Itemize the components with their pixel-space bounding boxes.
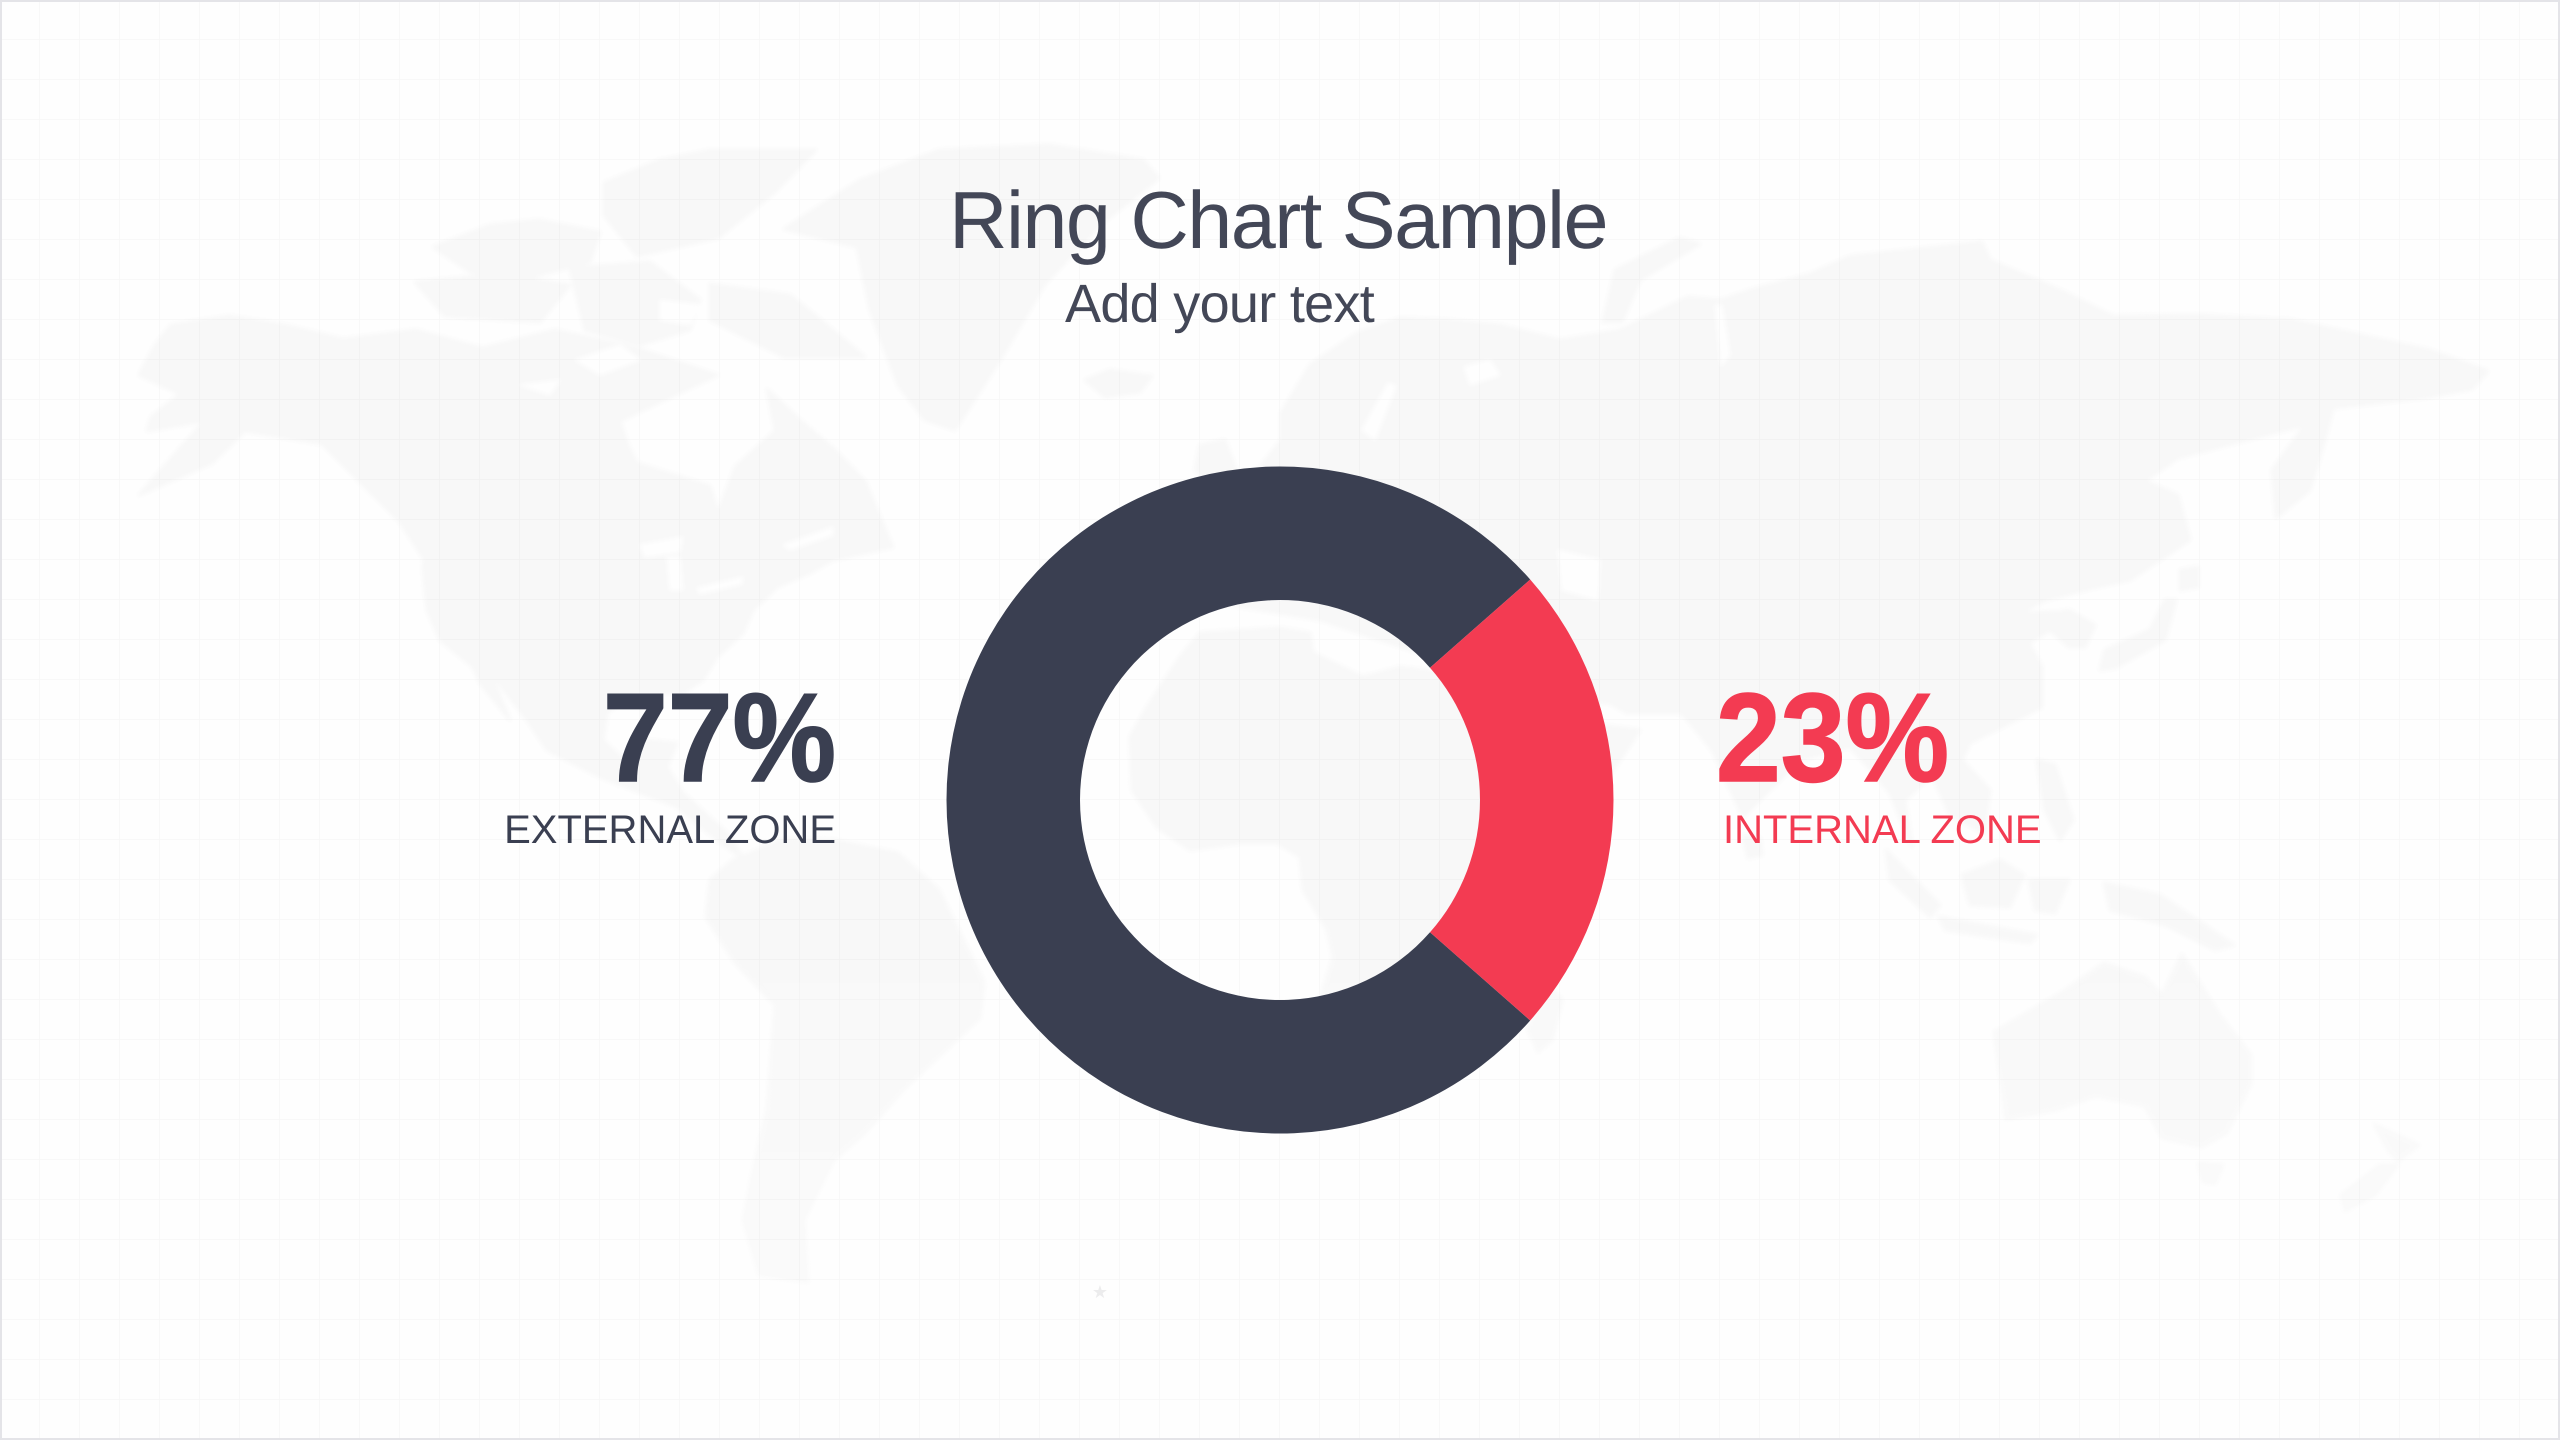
map: South America (706, 839, 984, 1282)
map: UK and Ireland (1195, 440, 1238, 490)
stat: external zone (504, 668, 836, 852)
world map backdrop (139, 145, 2488, 1282)
map: Southeast Asian islands (1743, 760, 2234, 950)
label: external zone: EXTERNAL ZONE (504, 808, 836, 852)
map: Tasmania (2198, 1163, 2223, 1184)
small star mark: ★ (1092, 1282, 1108, 1303)
value: 23%: 23% (1716, 668, 1949, 808)
subtitle: Add your text (1065, 274, 1375, 334)
stat: internal zone (1716, 668, 2042, 852)
label: internal zone: INTERNAL ZONE (1723, 808, 2042, 852)
ring segment: internal zone 23% (1430, 580, 1613, 1020)
title: Ring Chart Sample (949, 176, 1607, 266)
value: 77%: 77% (603, 668, 836, 808)
map: Japan (2100, 567, 2198, 670)
map: Arctic islands (415, 150, 865, 357)
map: New Zealand (2341, 1124, 2419, 1211)
map: Greenland (784, 145, 1159, 430)
map: North America (139, 316, 893, 860)
map: Iceland (1085, 370, 1152, 397)
map: Africa (1130, 628, 1640, 1060)
map: Novaya Zemlya (1603, 238, 1700, 322)
map: Eurasia (1180, 242, 2488, 847)
ring chart (946, 466, 1613, 1133)
map: Madagascar (1528, 985, 1562, 1052)
map: Australia (1994, 954, 2251, 1147)
map: inland waters (520, 300, 1730, 600)
ring segment: external zone 77% (946, 466, 1530, 1133)
